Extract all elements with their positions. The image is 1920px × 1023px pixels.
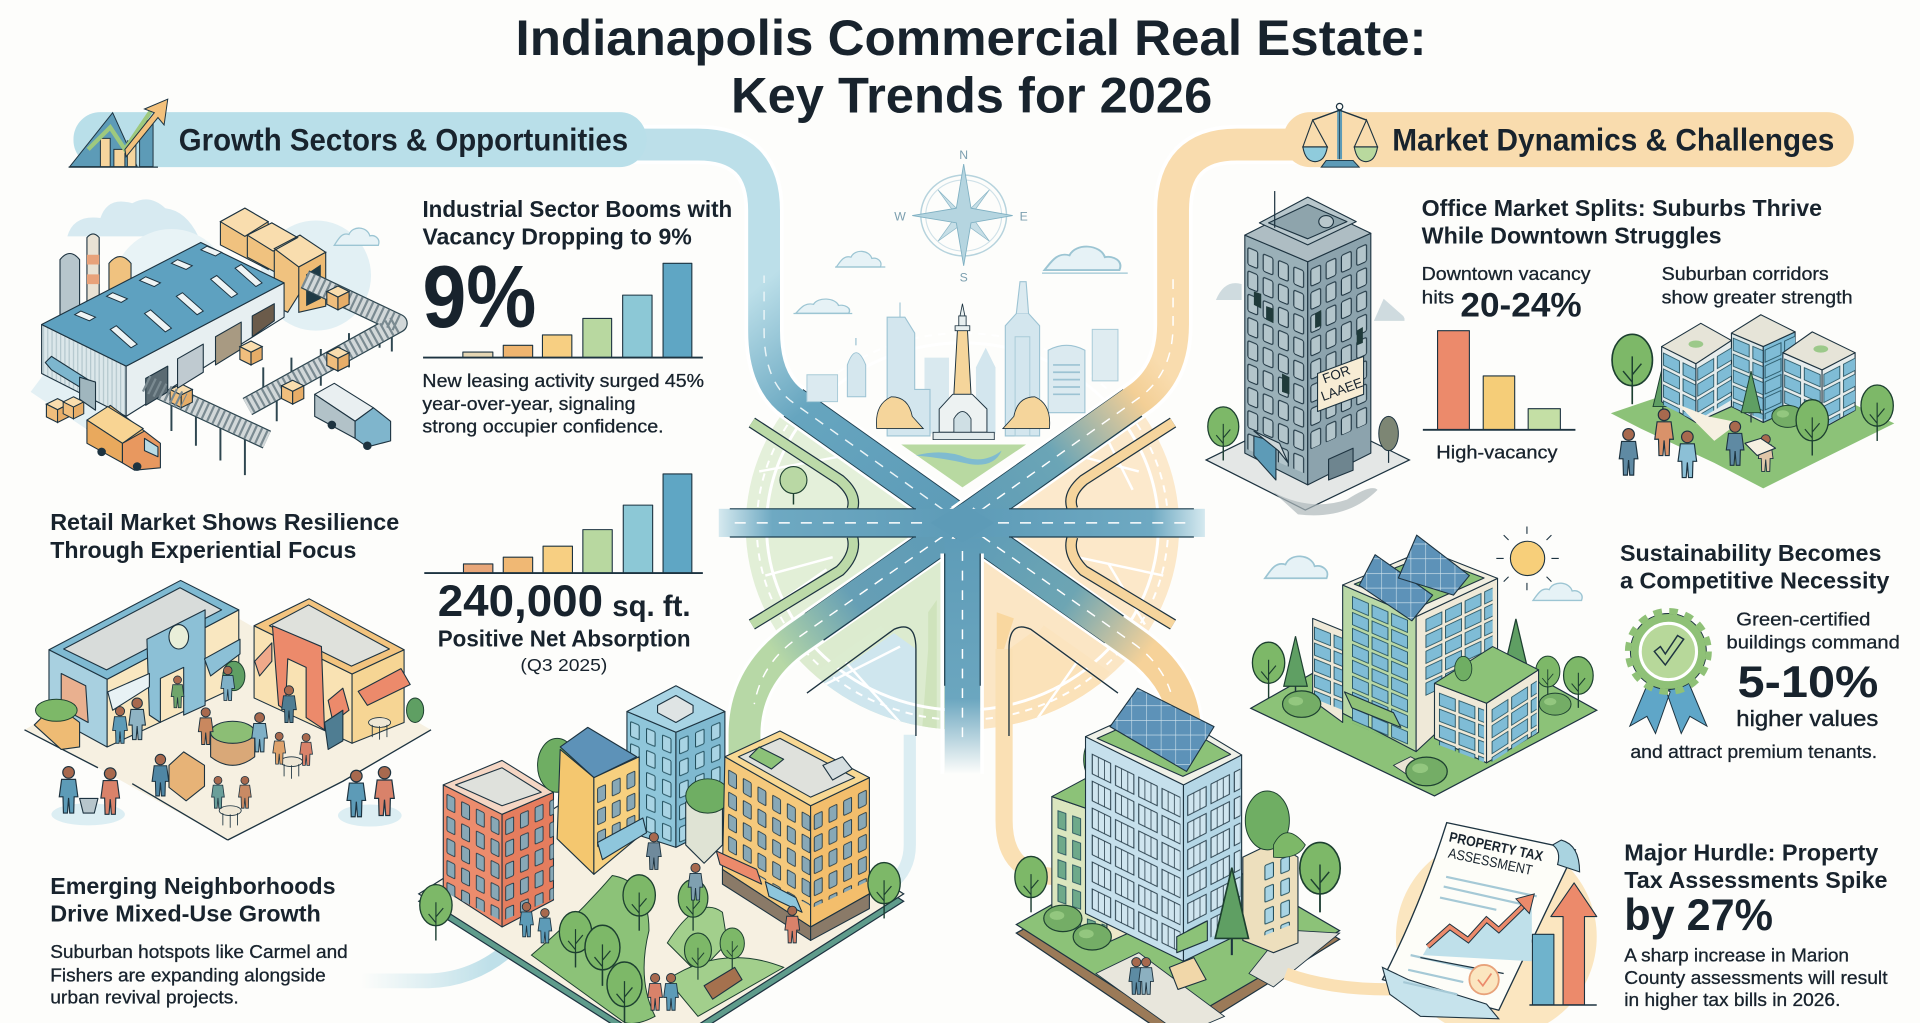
body text [1624,945,1888,1010]
panel: sustainability [1251,527,1900,796]
bar chart label: High-vacancy [1436,441,1558,462]
road: pale blue spur to neighbourhood [888,735,910,887]
icon: clouds above skyline [793,247,1128,314]
illustration: tax assessment document: PROPERTY TAX [1448,829,1545,864]
stat: green-certified premium: 5-10% [1738,658,1878,707]
header text: Growth Sectors & Opportunities [179,123,628,158]
compass rose: S [960,271,968,285]
heading line two: Drive Mixed-Use Growth [50,901,321,927]
road: left teal connector from Growth Sectors header [612,145,962,523]
compass rose: E [1020,209,1028,223]
illustration: downtown office tower: FOR [1320,362,1353,386]
bar chart: high vacancy [1423,331,1575,430]
stat: suburban corridors: show greater strength [1662,286,1853,307]
illustration: tax assessment document [1382,823,1597,1023]
header: Market Dynamics & Challenges [1283,103,1854,167]
body text [50,941,348,1008]
illustration: retail plaza [24,580,431,840]
heading line two: a Competitive Necessity [1620,567,1889,593]
heading: Emerging Neighborhoods [50,873,336,899]
stat: downtown vacancy: hits [1422,286,1454,307]
stat: green-certified premium [1630,609,1900,762]
illustration: green certified building [1251,527,1597,796]
title: Indianapolis Commercial Real Estate: [516,10,1427,66]
title [516,10,1427,124]
stat: downtown vacancy [1422,263,1591,325]
illustration: suburban office campus [1611,315,1894,488]
body text: Fishers are expanding alongside [50,964,326,985]
stat: green-certified premium: Green-certified [1736,609,1870,630]
body text: in higher tax bills in 2026. [1624,989,1840,1010]
orange ramp loop right [1071,422,1173,625]
heading: Industrial Sector Booms with [422,196,732,222]
statistic: by 27%: by 27% [1624,891,1773,940]
compass rose [894,148,1028,285]
body text: urban revival projects. [50,987,239,1008]
compass rose: W [894,209,906,223]
body text: strong occupier confidence. [422,415,664,436]
panel: retail market [24,474,703,840]
heading: Sustainability Becomes [1620,540,1881,566]
skyline with Soldiers and Sailors Monument [807,282,1118,487]
body text: A sharp increase in Marion [1624,945,1849,966]
panel: industrial sector [31,196,732,475]
statistic caption: Positive Net Absorption [438,626,691,652]
title: Key Trends for 2026 [731,68,1212,124]
body text: year-over-year, signaling [422,393,636,414]
illustration: downtown office tower: LAAEE [1319,375,1365,404]
road: east highway [962,509,1205,537]
road: green south-west connector [744,523,962,882]
heading: Major Hurdle: Property [1624,840,1878,866]
road: orange spur to green tower [1004,649,1060,877]
stat: green-certified premium: buildings command [1727,631,1900,652]
heading: Retail Market Shows Resilience [50,509,399,535]
illustration: warehouse with conveyors and trucks [31,199,398,475]
bar chart: vacancy [423,263,703,358]
icon: park tree on map [780,467,807,505]
compass rose: N [959,148,968,162]
icon: growth chart with arrow [69,99,168,167]
body text: County assessments will result [1624,967,1888,988]
stat: downtown vacancy: Downtown vacancy [1422,263,1591,284]
connector tail [361,947,512,981]
icon: balance scales [1303,103,1378,167]
big number: 9% [422,247,536,346]
heading: Office Market Splits: Suburbs Thrive [1422,195,1822,221]
statistic: 240,000 sq. ft.: 240,000 [438,577,603,626]
statistic: 240,000 sq. ft. [438,577,691,626]
body text: New leasing activity surged 45% [422,370,704,391]
panel: office market [1206,191,1894,515]
heading line two: Tax Assessments Spike [1624,867,1888,893]
heading line two: Through Experiential Focus [50,537,356,563]
central map disc with neighbourhood wedges [746,417,1179,729]
road: orange south-east connector [962,523,1185,796]
statistic: 240,000 sq. ft.: sq. ft. [612,590,691,623]
illustration: tax assessment document: ASSESSMENT [1447,845,1534,878]
hairpin ramp lines in lower wedges [807,627,1118,736]
stat: green-certified premium: and attract premium tenants. [1630,741,1877,762]
statistic period: (Q3 2025) [520,655,607,675]
road: west highway [719,509,962,537]
header text: Market Dynamics & Challenges [1392,123,1834,158]
panel: emerging neighborhoods [50,686,904,1023]
road: south highway [942,539,982,774]
stat: downtown vacancy: 20-24% [1460,287,1582,325]
stat: suburban corridors: Suburban corridors [1662,263,1829,284]
bar chart: absorption [424,474,703,573]
stat: green-certified premium: higher values [1736,706,1878,731]
body text: Suburban hotspots like Carmel and [50,941,348,962]
stat: suburban corridors [1662,263,1853,307]
road: right orange connector from Market Dynamics header [962,145,1310,523]
illustration: green tower with solar roof [1015,688,1340,1023]
illustration: mixed-use neighbourhood [419,686,904,1023]
heading line two: While Downtown Struggles [1422,222,1722,248]
illustration: downtown office tower [1206,191,1409,515]
body text [422,370,704,436]
header: Growth Sectors & Opportunities [69,99,647,167]
connector tail [1286,974,1390,989]
green ramp loop left [752,422,853,625]
heading line two: Vacancy Dropping to 9% [422,223,692,249]
icon: certification rosette [1628,611,1709,734]
chart: rising bar and arrow [1529,883,1597,1005]
road junction hub [931,503,994,542]
panel: property tax [1286,823,1888,1023]
